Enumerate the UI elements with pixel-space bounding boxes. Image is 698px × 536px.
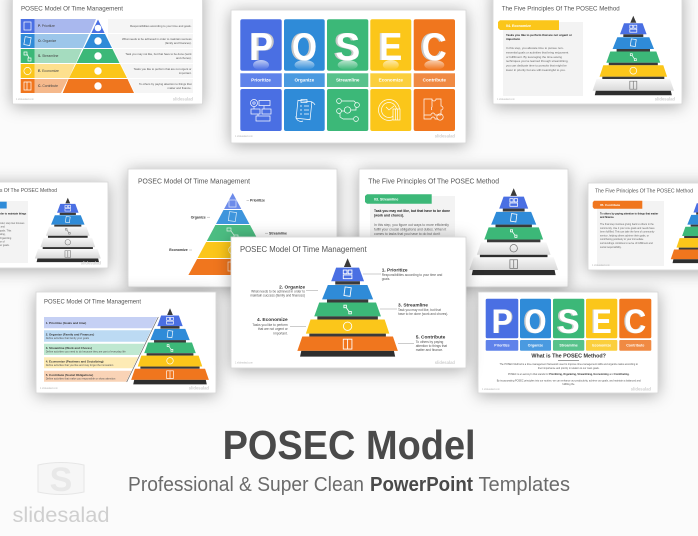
text block: (work and chores). — [374, 214, 404, 218]
layer: Contribute — [297, 336, 398, 357]
right descriptions: What needs to be achieved in order to maintain success — [122, 37, 192, 41]
column: Contribute — [414, 19, 455, 131]
slide: pyramid table of time management — [12, 0, 202, 104]
column: Prioritize: Prioritize — [251, 78, 271, 83]
footer: 1 slidesalad.com — [482, 388, 500, 391]
text block — [600, 212, 658, 249]
right descriptions: Task you may not like, but that have to be done (work — [125, 52, 192, 56]
paragraph text: fulfilling life. — [562, 383, 575, 386]
text block: and finance. — [600, 216, 615, 219]
gray text panel — [0, 201, 28, 263]
layer: Streamline — [314, 303, 381, 320]
tag: Economize — [498, 20, 559, 30]
pyramid: all colored — [671, 197, 698, 263]
row text: 3. Streamline (Work and Chores) — [46, 346, 92, 350]
label: 5. Contribute: matter and finance. — [416, 348, 443, 352]
footer: slidesalad — [655, 96, 675, 102]
layer: Prioritize — [331, 268, 364, 285]
row labels: E. Economize — [38, 69, 59, 73]
letter columns: C — [623, 303, 645, 341]
slide: triangular POSEC pyramid with labels — [128, 169, 337, 287]
text block: lower in priority but are still meaningful to you. — [506, 68, 566, 72]
footer — [235, 134, 455, 138]
column: Organize: O — [292, 26, 317, 69]
row labels: C. Contribute — [38, 84, 58, 88]
pyramid: Economize highlighted — [593, 16, 674, 95]
text block: important. — [506, 37, 521, 41]
pyramid: all colored — [131, 308, 209, 384]
tag: Economize: 04. Economize — [506, 24, 531, 28]
logo: slidesalad: S — [50, 461, 72, 499]
row text: Define activities you need to do because they are part of everyday life — [46, 349, 126, 353]
paragraph text: The POSEC Method is a time-management framework used to improve time-management skills and organize tasks according to — [499, 363, 639, 366]
label: 3. Streamline — [398, 303, 448, 316]
label: 1. Prioritize: Responsibilities according to your time and — [382, 273, 443, 277]
tag: Streamline — [365, 194, 432, 204]
subtitle: Professional & Super Clean — [128, 474, 364, 496]
pyramid labels: Organize — [191, 215, 206, 219]
label: 2. Organize — [250, 284, 305, 298]
letter columns: Contribute — [626, 343, 644, 347]
footer — [482, 386, 651, 391]
footer: slidesalad — [173, 96, 193, 102]
row labels: S. Streamline — [38, 54, 58, 58]
label: 1. Prioritize — [382, 268, 443, 281]
subtitle: Templates — [478, 474, 570, 496]
pyramid labels: Economize — [169, 248, 188, 252]
paragraph text: their importance and priority in relation to our main goals. — [538, 367, 600, 370]
column: Prioritize: P — [251, 26, 275, 69]
layer: Economize — [306, 320, 389, 336]
label: 5. Contribute: 5. Contribute — [416, 334, 446, 340]
text block: or fulfillment. By leveraging the time-saving — [506, 55, 562, 59]
tag: Contribute: 05. Contribute — [600, 203, 620, 207]
pyramid labels: Streamline — [269, 231, 287, 235]
text block: surroundings. Activities to serve of fulfillment and — [600, 242, 653, 245]
footer — [497, 96, 675, 102]
row labels: O. Organize — [38, 39, 56, 43]
column: Streamline: S — [335, 26, 360, 69]
footer: slidesalad — [435, 134, 455, 138]
text block: In this step, you allocate time to pursue non- — [506, 46, 564, 50]
label: 4. Economize: that are not urgent or — [258, 327, 289, 331]
text block: To others by paying attention to things that matter — [600, 212, 658, 215]
label: 3. Streamline: Task you may not like, but that — [398, 308, 441, 312]
logo: slidesalad: slidesalad — [12, 504, 110, 527]
footer: 1 slidesalad.com — [40, 387, 58, 390]
letter columns: C — [624, 303, 646, 341]
column: Organize: Organize — [294, 78, 315, 83]
letter columns: P — [492, 303, 512, 341]
pyramid labels — [169, 199, 287, 252]
column: Contribute: Contribute — [423, 78, 446, 83]
footer: 1 slidesalad.com — [16, 98, 34, 101]
logo: slidesalad — [12, 461, 110, 527]
gray text panel — [370, 196, 455, 284]
text block: service, helping others achieve their goals, or — [600, 234, 649, 237]
pyramid: Streamline highlighted — [469, 188, 558, 275]
label: 4. Economize: important. — [274, 332, 288, 336]
text block: The final step involves giving back to others in the — [600, 223, 654, 226]
paragraph text — [497, 363, 641, 386]
label: 1. Prioritize: 1. Prioritize — [382, 268, 408, 274]
icon squares — [21, 19, 34, 93]
paragraph text: By incorporating POSEC principles into our routine, we can enhance our productivity, achieve our goals, and maintain a balanced and — [497, 379, 641, 382]
slide title: POSEC Model Of Time Management — [240, 245, 367, 254]
text block — [0, 212, 27, 247]
label: 4. Economize: 4. Economize — [257, 317, 288, 323]
row text: 4. Economize (Pastimes and Socializing) — [46, 360, 104, 364]
slide: POSEC letters and icons — [231, 10, 466, 143]
letter columns: Streamline — [559, 343, 578, 347]
label: 2. Organize: maintain success (family and finances) — [250, 294, 305, 298]
footer brand: slidesalad — [81, 260, 101, 266]
slide title: The Five Principles Of The POSEC Method — [368, 178, 499, 186]
right descriptions — [122, 24, 192, 90]
column: Organize — [284, 19, 325, 131]
letter columns: Organize — [528, 343, 543, 347]
label: 2. Organize: 2. Organize — [279, 284, 305, 290]
letter columns: E — [590, 303, 610, 341]
row text: Define activities that make you responsible or show attention — [46, 376, 116, 380]
footer — [16, 96, 193, 102]
slide: five principles, Contribute (cropped right) — [588, 183, 698, 270]
triangle pyramid — [188, 193, 277, 275]
row text — [46, 321, 126, 380]
text block: essential goals or activities that bring enjoyment — [506, 50, 569, 54]
right descriptions: and chores). — [176, 56, 192, 60]
column: Economize — [370, 19, 411, 131]
right descriptions: matter and finance. — [168, 86, 192, 90]
label: 5. Contribute — [416, 334, 447, 352]
right descriptions: (family and finances). — [165, 41, 192, 45]
right descriptions: important. — [179, 71, 192, 75]
row labels — [38, 24, 59, 88]
text block — [506, 33, 573, 72]
tag: Contribute — [593, 201, 642, 209]
footer: 1 slidesalad.com — [497, 98, 515, 101]
connector lines — [290, 274, 414, 344]
row text: 5. Contribute (Social Obligations) — [46, 373, 93, 377]
column: Economize: E — [378, 26, 400, 69]
footer: 1 slidesalad.com — [235, 362, 253, 364]
column: Contribute: C — [422, 26, 447, 69]
letter columns — [486, 299, 651, 351]
label: 4. Economize: Tasks you like to perform — [252, 323, 288, 327]
text block: fulfill your crucial obligations and duties. When it — [374, 228, 446, 232]
letter columns: O — [524, 303, 546, 341]
letter columns: Economize — [592, 343, 611, 347]
footer: 1 slidesalad.com — [592, 264, 610, 267]
text block: contributing positively to your immediate — [600, 238, 644, 241]
text block: In this step, you figure out ways to more efficiently — [374, 223, 449, 227]
main title: POSEC Model — [223, 422, 476, 468]
column: Streamline — [327, 19, 368, 131]
right description panels — [108, 19, 193, 93]
heading: What is The POSEC Method? — [531, 354, 606, 360]
column: Prioritize — [240, 19, 282, 131]
text block: techniques you've learned through streamlining, — [506, 59, 568, 63]
slide title: The Five Principles Of The POSEC Method — [595, 188, 693, 194]
column: Streamline: Streamline — [336, 78, 360, 83]
slide title: POSEC Model Of Time Management — [44, 300, 141, 306]
letter columns: O — [523, 303, 545, 341]
text block — [374, 209, 450, 236]
paragraph text: POSEC is an acronym that stands for Prioritizing, Organizing, Streamlining, Economizing and Contributing. — [508, 373, 630, 376]
row text: Define activities that family your goals — [46, 336, 90, 340]
label: 2. Organize: What needs to be achieved in order to — [251, 290, 305, 294]
slanted divider line — [127, 317, 158, 382]
label: 5. Contribute: To others by paying — [416, 340, 444, 344]
column: Organize: O — [290, 26, 315, 69]
gray text panel — [597, 201, 664, 266]
letter columns: S — [558, 303, 580, 341]
text block: Task you may not like, but that have to be done — [374, 209, 450, 213]
pyramid: Organize highlighted — [35, 198, 101, 262]
tag: Organize — [0, 202, 7, 208]
column: Streamline: S — [333, 26, 358, 69]
text block: social responsibility. — [600, 246, 622, 249]
footer: slidesalad — [631, 386, 651, 391]
label: 5. Contribute: attention to things that — [416, 344, 447, 348]
subtitle: PowerPoint — [370, 474, 473, 496]
text block: you can dedicate time to pursuits that might be — [506, 64, 567, 68]
pyramid — [297, 258, 398, 357]
column: Economize: E — [379, 26, 402, 69]
slide: five principles, Economize — [493, 0, 682, 104]
pyramid with badges — [63, 19, 134, 93]
letter columns: P — [492, 303, 514, 341]
text block: Tasks you like to perform that are not urgent or — [506, 33, 573, 37]
slide: pyramid with listed rows — [36, 292, 216, 393]
text block: been fulfilled. This can take the form of community — [600, 231, 655, 234]
label: 3. Streamline: 3. Streamline — [398, 303, 428, 309]
footer — [235, 360, 455, 365]
column: Contribute: C — [420, 26, 445, 69]
row text: 1. Prioritize (Goals and time) — [46, 321, 86, 325]
slide: five principles, Organize (cropped left) — [0, 182, 108, 268]
row text: Define activities that you like and may forget the innovation — [46, 363, 114, 367]
footer — [40, 386, 209, 390]
gray text panel — [503, 22, 583, 96]
column: Economize: Economize — [379, 78, 403, 83]
letter columns: S — [556, 303, 578, 341]
footer: slidesalad — [435, 360, 455, 365]
column: Prioritize: P — [249, 26, 273, 69]
right descriptions: To others by paying attention to things that — [139, 82, 192, 86]
subtitle — [128, 474, 570, 496]
layer: Organize — [322, 285, 373, 303]
right descriptions: Tasks you like to perform that are not urgent or — [134, 67, 192, 71]
row text: 2. Organize (Family and Finances) — [46, 332, 94, 336]
tag: Streamline: 03. Streamline — [374, 198, 398, 202]
footer: 1 slidesalad.com — [235, 135, 253, 138]
pyramid labels: Prioritize — [250, 199, 265, 203]
text block: comes to tasks that you have to do but don't — [374, 232, 440, 236]
label: 1. Prioritize: goals. — [382, 277, 390, 281]
text block: community. Use it your core goals and needs have — [600, 227, 655, 230]
label: 4. Economize — [252, 317, 289, 336]
slide: five principles, Streamline — [359, 169, 568, 287]
colored rows — [44, 317, 157, 382]
slide: what is the POSEC method — [478, 292, 658, 393]
footer: slidesalad — [189, 386, 209, 390]
slide title: The Five Principles Of The POSEC Method — [502, 6, 620, 12]
slide title: POSEC Model Of Time Management — [21, 6, 123, 12]
label: 3. Streamline: have to be done (work and chores). — [398, 312, 448, 316]
slide: central pyramid with five labels — [231, 237, 466, 368]
letter columns: E — [592, 303, 612, 341]
slide title: POSEC Model Of Time Management — [138, 178, 250, 186]
right descriptions: Responsibilities according to your time and goals. — [130, 24, 192, 28]
letter columns: Prioritize — [494, 343, 510, 347]
left colored bands — [34, 19, 96, 93]
row labels: P. Prioritize — [38, 24, 55, 28]
